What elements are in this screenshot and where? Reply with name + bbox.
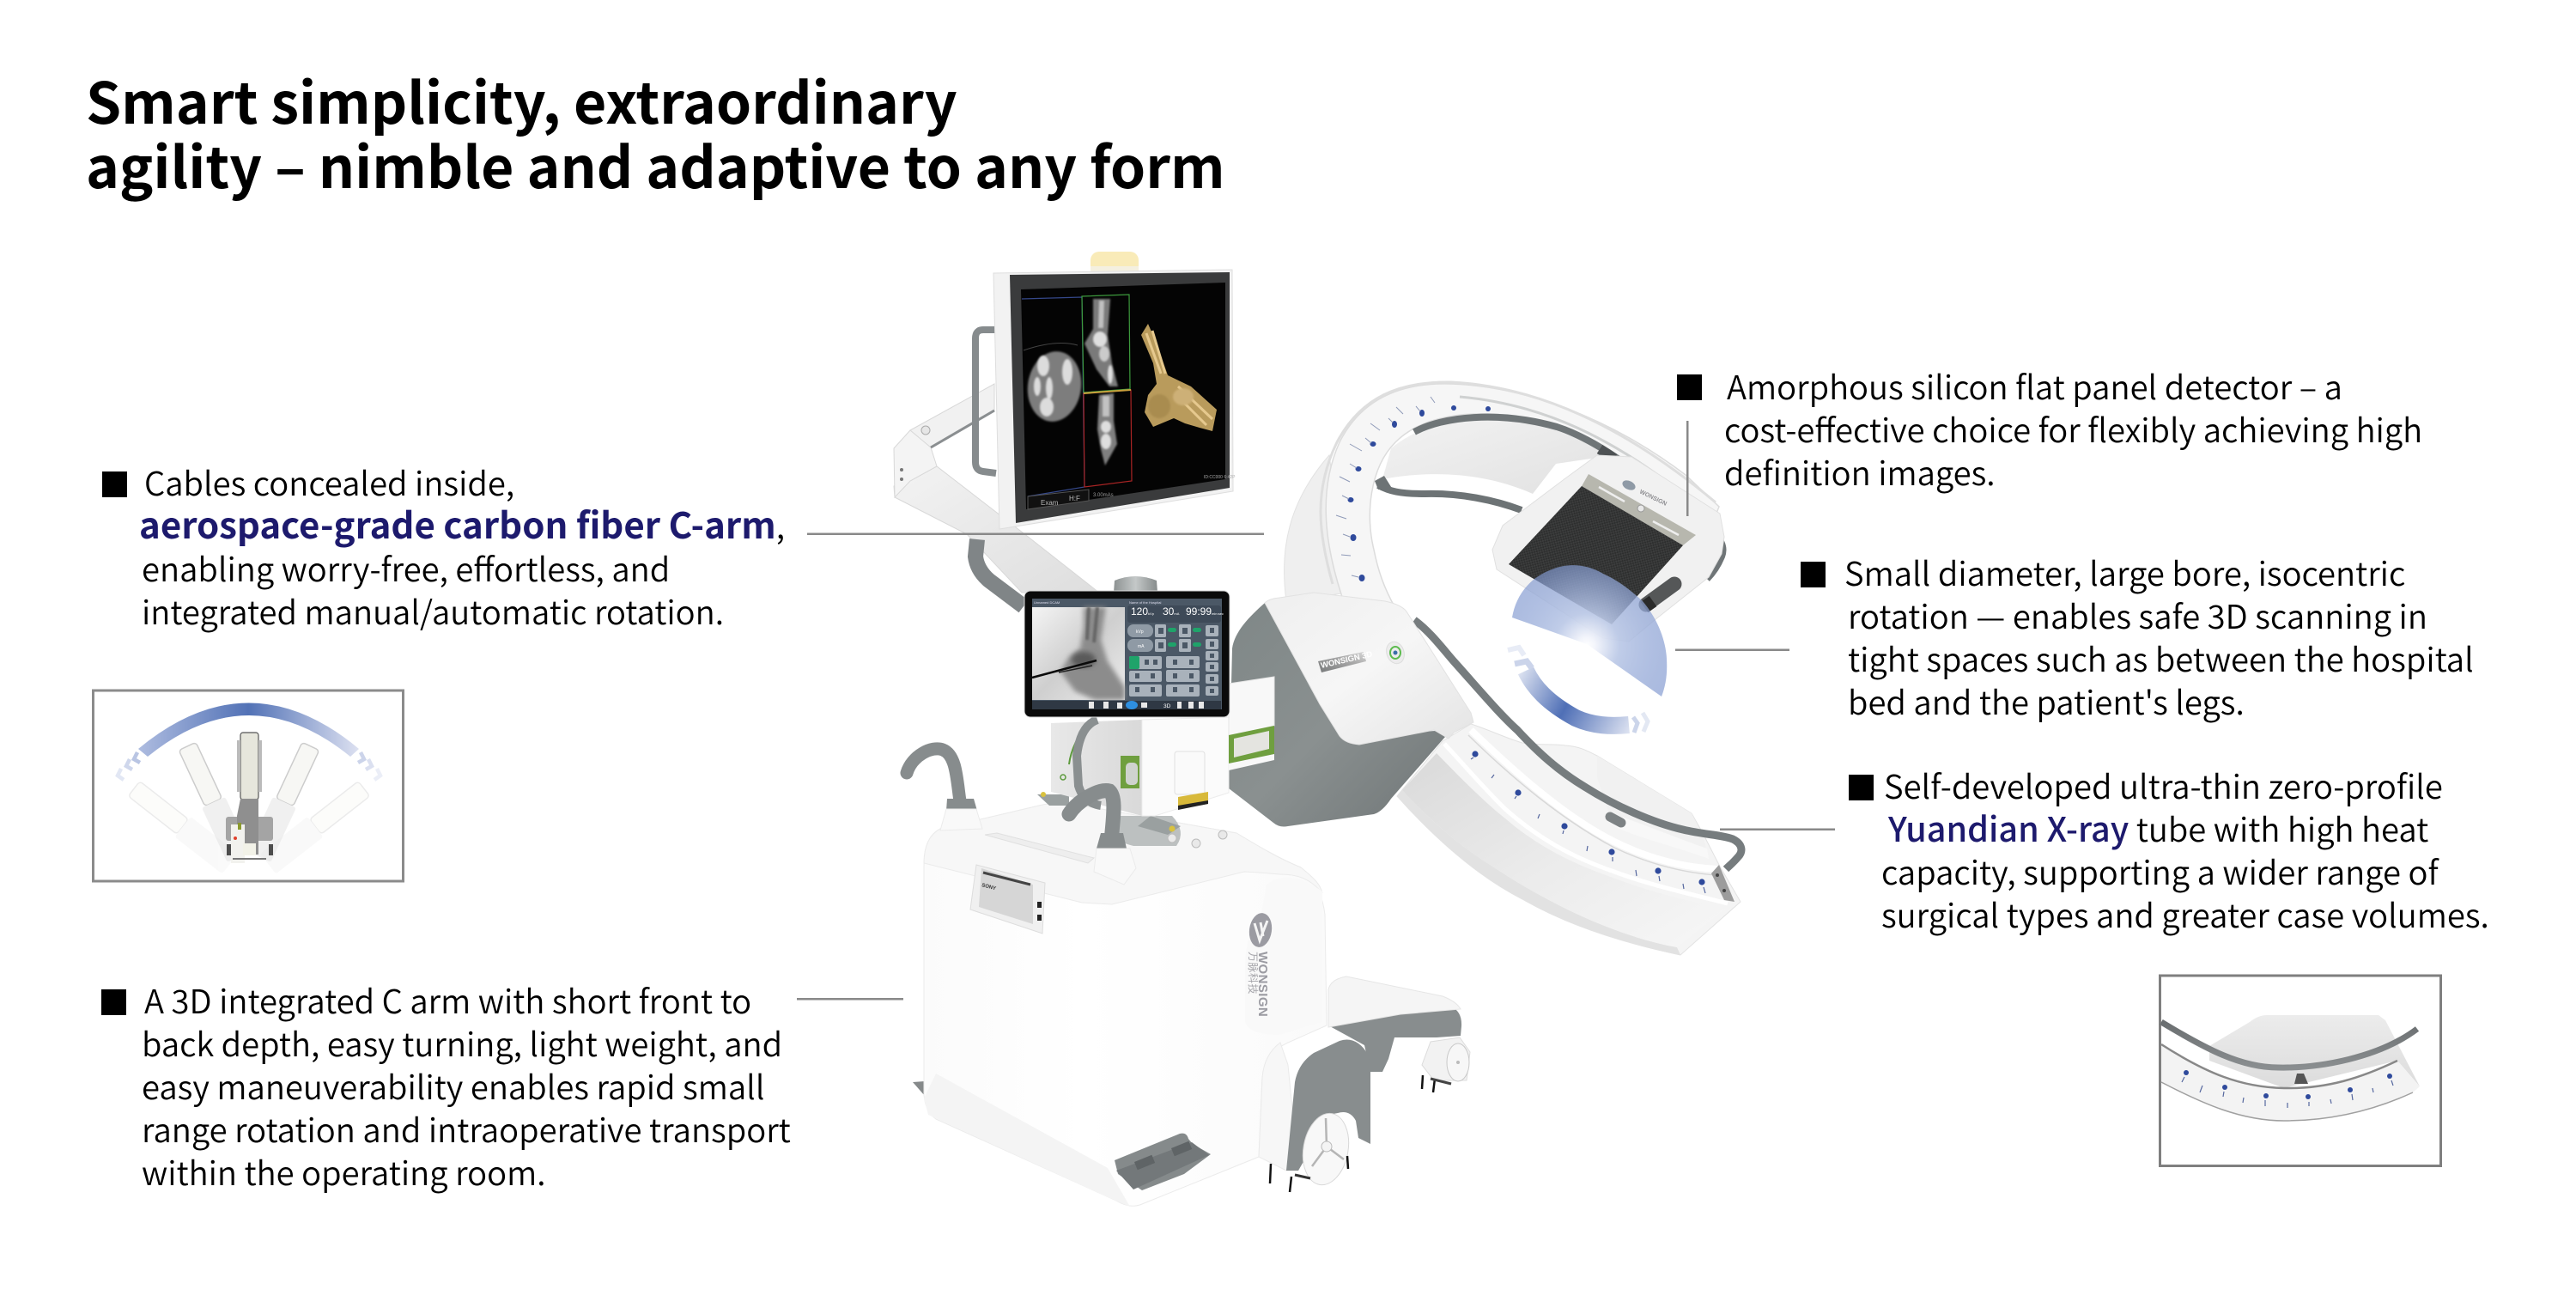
- title: [86, 58, 1225, 205]
- scale ring: [2161, 1044, 2420, 1121]
- C-arm upper section: [1285, 382, 1723, 608]
- title: agility – nimble and adaptive to any form: [86, 123, 1225, 205]
- rear caster arm: [1328, 976, 1470, 1092]
- chassis logo: 万脉科技: [1246, 952, 1261, 995]
- X-ray beam fan: [1512, 565, 1667, 697]
- CT views: H:F: [1069, 495, 1080, 502]
- tablet control buttons: mA: [1138, 644, 1145, 649]
- text block: isocentric rotation: Small diameter, large bore, isocentric: [1844, 549, 2405, 596]
- status indicator: [1383, 639, 1407, 666]
- central C-arm view: [226, 733, 273, 863]
- text block: Yuandian X-ray tube: Yuandian X-ray tube with high heat: [1887, 803, 2428, 852]
- chassis shell: [924, 803, 1327, 1206]
- tablet control buttons: [1127, 624, 1218, 697]
- WONSIGN 3D badge: WONSIGN 3D: [1320, 649, 1373, 671]
- text block: isocentric rotation: [1801, 549, 2474, 725]
- ring scale dots: [2184, 1070, 2392, 1099]
- CT views: 3.00mAs: [1093, 493, 1114, 498]
- text block: short depth C arm: A 3D integrated C arm with short front to: [144, 976, 751, 1024]
- mobile base chassis: [913, 803, 1470, 1207]
- support column: [1037, 677, 1274, 848]
- text block: short depth C arm: back depth, easy turning, light weight, and: [142, 1019, 782, 1067]
- gantry body: [1229, 593, 1473, 826]
- tablet bottom bar: 3D: [1163, 703, 1171, 709]
- text block: flat panel detector: cost-effective choice for flexibly achieving high: [1724, 405, 2422, 453]
- arc chevrons: [118, 752, 380, 780]
- left handle: [907, 749, 982, 830]
- text block: Yuandian X-ray tube: capacity, supporting a wider range of: [1881, 848, 2439, 895]
- text block: short depth C arm: range rotation and intraoperative transport: [142, 1105, 791, 1153]
- text block: short depth C arm: within the operating room.: [142, 1148, 546, 1195]
- tablet control buttons: kVp: [1136, 630, 1144, 635]
- inset: rotation ghost views: [93, 690, 404, 881]
- text block: carbon fiber C-arm: [102, 459, 785, 635]
- text block: Yuandian X-ray tube: [1849, 762, 2489, 938]
- x-ray image: [1032, 607, 1125, 700]
- title: Smart simplicity, extraordinary: [86, 58, 957, 141]
- rear tab: [913, 1081, 925, 1096]
- foot pedal: [1115, 1134, 1211, 1190]
- text block: flat panel detector: [1677, 362, 2422, 496]
- machine illustration: [894, 252, 1741, 1207]
- monitor support arm: [894, 384, 1099, 593]
- text block: carbon fiber C-arm: enabling worry-free, effortless, and: [142, 544, 670, 592]
- text block: isocentric rotation: rotation — enables safe 3D scanning in: [1848, 592, 2427, 639]
- text block: flat panel detector: definition images.: [1724, 448, 1996, 496]
- CT views: Exam: [1041, 499, 1059, 507]
- chassis logo: WONSIGN: [1255, 952, 1270, 1017]
- chassis logo: [1246, 911, 1274, 1017]
- front wheel housing: [1259, 1040, 1370, 1192]
- ghost positions: [126, 779, 238, 874]
- leader line: chassis: [797, 998, 903, 1000]
- tablet top readouts: [1034, 600, 1224, 623]
- detector logo: WONSIGN: [1638, 490, 1668, 508]
- text block: isocentric rotation: bed and the patient's legs.: [1848, 678, 2245, 725]
- text block: Yuandian X-ray tube: surgical types and greater case volumes.: [1881, 891, 2489, 938]
- C-arm scale dots: [1348, 405, 1491, 581]
- info label plate: SONY: [981, 883, 996, 891]
- C-arm lower section: [1397, 620, 1741, 955]
- telescopic slide: [1229, 677, 1274, 770]
- long grey cable: [1414, 620, 1741, 869]
- flat panel detector: [1492, 455, 1724, 642]
- monitor: [993, 252, 1236, 529]
- text block: Yuandian X-ray tube: Self-developed ultra-thin zero-profile: [1884, 762, 2443, 809]
- text block: carbon fiber C-arm: aerospace-grade carbon fiber C-arm,: [139, 497, 785, 550]
- lower arm handle: [975, 539, 1024, 606]
- detector logo: [1621, 478, 1668, 508]
- monitor handle: [975, 330, 996, 473]
- text block: short depth C arm: [101, 976, 791, 1195]
- gantry cover: [1265, 593, 1473, 745]
- column grab handle: [1077, 720, 1101, 806]
- text block: short depth C arm: easy maneuverability enables rapid small: [142, 1062, 764, 1110]
- leader line: X-ray tube: [1720, 828, 1835, 830]
- CT views: [1022, 295, 1236, 509]
- tablet top readouts: Unnamed DCAM: [1034, 600, 1060, 605]
- inset: X-ray tube housing close-up: [2160, 976, 2440, 1166]
- control tablet: [1024, 591, 1230, 717]
- tablet top readouts: 30mA: [1163, 605, 1180, 617]
- text block: carbon fiber C-arm: Cables concealed inside,: [144, 459, 514, 506]
- CT views: ID:CC000 6:42P: [1204, 475, 1236, 480]
- tube housing: [2209, 1015, 2420, 1088]
- rotation arrow arc: [1508, 648, 1648, 733]
- tablet bottom bar: [1032, 701, 1221, 709]
- text block: carbon fiber C-arm: integrated manual/automatic rotation.: [142, 587, 724, 635]
- control knob: [1114, 576, 1157, 593]
- rotation arc: [138, 703, 359, 757]
- tube: [2161, 1022, 2417, 1068]
- text block: flat panel detector: Amorphous silicon flat panel detector – a: [1727, 362, 2342, 410]
- leader line: isocentric rotation: [1675, 649, 1789, 651]
- leader line: detector: [1686, 421, 1688, 516]
- tablet top readouts: 120kVp: [1131, 605, 1155, 617]
- detector cable: [1414, 417, 1723, 579]
- info label plate: [970, 865, 1045, 934]
- leader line: carbon fiber C-arm: [807, 532, 1264, 535]
- right handle: [1069, 791, 1136, 885]
- tablet top readouts: 99:99min:sec: [1186, 605, 1224, 617]
- text block: isocentric rotation: tight spaces such as between the hospital: [1848, 635, 2474, 682]
- tablet top readouts: Name of the Hospital: [1129, 600, 1161, 605]
- lower scale dots: [1472, 751, 1705, 885]
